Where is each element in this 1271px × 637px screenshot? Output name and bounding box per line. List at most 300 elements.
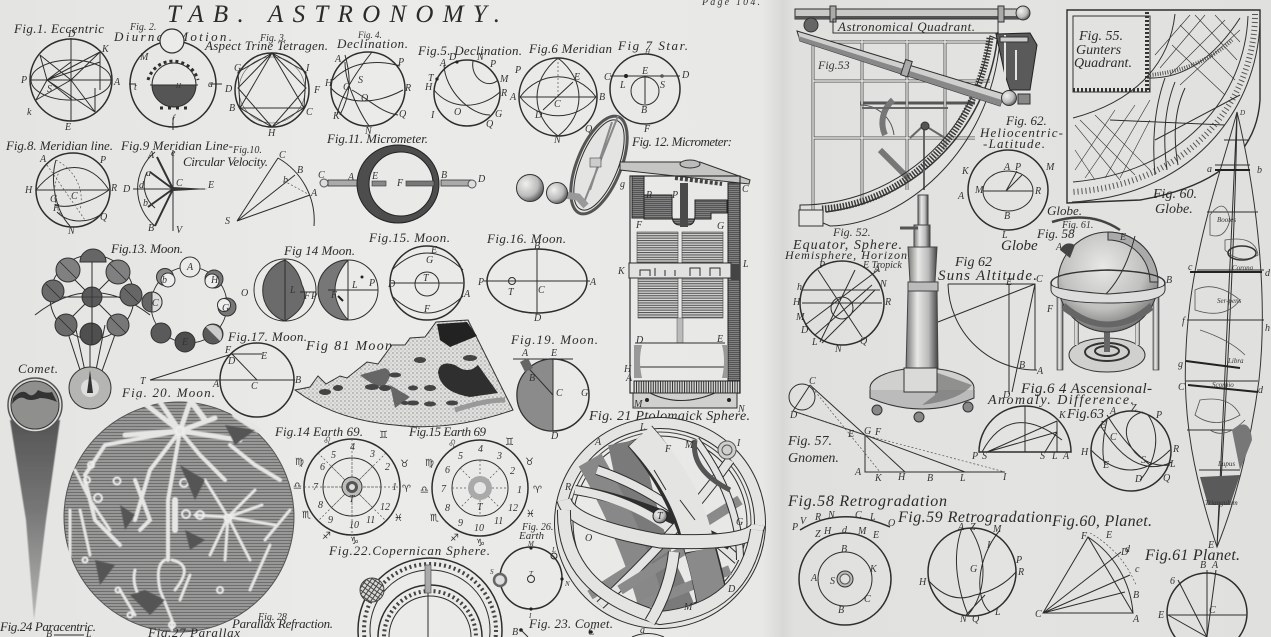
figure 14: earth zodiac: 5 bbox=[331, 450, 336, 461]
figure 16: moon orbit ellipse bbox=[477, 231, 597, 324]
figure 61: planet: E bbox=[1157, 610, 1164, 621]
figure 11: micrometer ring bbox=[318, 131, 486, 223]
figure 62: heliocentric latitude: B bbox=[1004, 211, 1010, 222]
figure 52: equator sphere: N bbox=[879, 279, 888, 290]
figure 3: aspect trine tetragon bbox=[204, 33, 328, 139]
figure 17: moon geometry: E bbox=[260, 351, 267, 362]
figure 61 and 58: globe: B bbox=[1166, 275, 1172, 286]
figure 61 and 58: globe: Globe. bbox=[1047, 203, 1082, 218]
figure 21: ptolemaic armillary sphere: G bbox=[736, 517, 743, 528]
figure 14: earth zodiac: 6 bbox=[320, 462, 325, 473]
figure 57: gnomon: D bbox=[789, 410, 798, 421]
figure 12: micrometer instrument: E bbox=[716, 334, 723, 345]
figure 58: retrogradation: C bbox=[864, 594, 871, 605]
figure 12: micrometer instrument bbox=[516, 109, 750, 415]
figure 19: moon half shaded: A bbox=[521, 348, 529, 359]
figure 52: equator sphere: Fig. 52. bbox=[832, 225, 871, 239]
figure 26: earth orbit: S bbox=[490, 568, 494, 576]
figure 52: equator sphere: N bbox=[834, 344, 843, 355]
figure 60: globe gore: d bbox=[1258, 385, 1264, 396]
figure 15: earth zodiac: ♏︎ bbox=[430, 513, 439, 524]
figure 13b: moon orbit ring: C bbox=[152, 298, 159, 309]
graduated limb bbox=[800, 36, 1000, 226]
figure 15: earth zodiac: 7 bbox=[441, 484, 447, 495]
figure 58: retrogradation: H bbox=[823, 526, 832, 537]
figure 61: planet: C bbox=[1209, 605, 1216, 616]
figure 15: moon bbox=[368, 230, 471, 320]
figure 21: ptolemaic armillary sphere: O bbox=[585, 533, 592, 544]
figure 10: circular velocity: A bbox=[310, 188, 318, 199]
figure 57: gnomon: C bbox=[809, 376, 816, 387]
figure 11: micrometer ring: C bbox=[318, 170, 325, 181]
figure 10: circular velocity: C bbox=[279, 150, 286, 161]
figure 14: earth zodiac: ♌︎ bbox=[323, 436, 332, 447]
figure 63 bbox=[1066, 403, 1179, 491]
figure 61: planet bbox=[1144, 547, 1247, 637]
figure 9: meridian line: e bbox=[171, 148, 176, 159]
figure 57: gnomon: K bbox=[874, 473, 883, 484]
figure 10: circular velocity bbox=[183, 145, 318, 227]
figure 26: earth orbit: Fig. 26. bbox=[521, 522, 553, 533]
figure 59: retrogradation: G bbox=[970, 564, 977, 575]
telescope lower tube bbox=[797, 31, 1030, 106]
figure 14: earth zodiac: T bbox=[349, 494, 356, 505]
figure 14: earth zodiac: Fig.14 Earth 69. bbox=[274, 424, 363, 439]
figure 9: meridian line: b bbox=[143, 198, 148, 209]
figure 5: declination: Q bbox=[486, 119, 494, 130]
figure 11: micrometer ring: D bbox=[477, 174, 486, 185]
figure 52: equator sphere: Q bbox=[860, 336, 868, 347]
figure 8: meridian line: C bbox=[71, 191, 78, 202]
figure 14: earth zodiac: ♎︎ bbox=[293, 481, 302, 492]
figure 60: globe gore: Lupus bbox=[1217, 460, 1235, 468]
figure 15: earth zodiac: 5 bbox=[458, 451, 463, 462]
figure 58: retrogradation: S bbox=[830, 576, 835, 587]
figure 57: gnomon: I bbox=[1002, 472, 1007, 483]
figure 62: suns altitude bbox=[938, 255, 1044, 401]
figure 3: aspect trine tetragon: G bbox=[234, 63, 241, 74]
moon rays and craters bbox=[70, 400, 290, 630]
figure 21: ptolemaic armillary sphere: T bbox=[657, 511, 664, 522]
figure 15: earth zodiac bbox=[408, 424, 542, 549]
figure 64: ascensional difference: L bbox=[1051, 451, 1058, 462]
figure 10: circular velocity: S bbox=[225, 216, 230, 227]
figure 11: micrometer ring: Fig.11. Micrometer. bbox=[326, 131, 428, 146]
figure 52: equator sphere: E Tropick bbox=[862, 260, 902, 271]
figure 60: globe gore: Ser-pens bbox=[1217, 297, 1242, 305]
figure 52: equator sphere: H bbox=[792, 297, 801, 308]
figure 14: earth zodiac: ♑︎ bbox=[350, 536, 359, 547]
figure 1: eccentric: P bbox=[20, 75, 27, 86]
figure 52: equator sphere bbox=[784, 225, 907, 355]
figure 9: meridian line: A bbox=[147, 150, 155, 161]
figure 57: gnomon: A bbox=[854, 467, 862, 478]
figure 14: earth zodiac: ♏︎ bbox=[302, 510, 311, 521]
figure 4: declination: S bbox=[358, 75, 363, 86]
figure 5: declination: R bbox=[500, 88, 507, 99]
figure 7: star: C bbox=[604, 72, 611, 83]
figure 26: earth orbit: I bbox=[528, 612, 532, 620]
figure 55: gunter's quadrant: Gunters bbox=[1076, 43, 1122, 58]
figure 25: large moon map bbox=[64, 400, 294, 632]
figure 4: declination: Declination. bbox=[336, 36, 408, 51]
telescope upper tube bbox=[795, 6, 1030, 33]
figure 64: ascensional difference: P bbox=[971, 451, 978, 462]
figure 23: comet: a bbox=[640, 625, 645, 636]
figure 11: micrometer ring: F bbox=[396, 178, 404, 189]
figure 8: meridian line: F bbox=[52, 203, 60, 214]
figure 21: ptolemaic armillary sphere: M bbox=[683, 602, 693, 613]
figure 57: gnomon: E bbox=[847, 429, 854, 440]
figure 15: earth zodiac: ♌︎ bbox=[448, 439, 457, 450]
figure 13b: moon orbit ring: b bbox=[162, 275, 167, 286]
figure 62: heliocentric latitude: L bbox=[1001, 230, 1008, 241]
figure 2: diurnal motion: H bbox=[175, 82, 182, 90]
figure 63: P bbox=[1155, 410, 1162, 421]
figure 60: globe gore: Libra bbox=[1227, 357, 1244, 365]
figure 63: H bbox=[1080, 447, 1089, 458]
figure 61: planet: Fig.61 Planet. bbox=[1144, 547, 1240, 564]
figure 5: declination: N bbox=[476, 52, 485, 63]
figure 63: R bbox=[1172, 444, 1179, 455]
figure 6: meridian: D bbox=[534, 110, 543, 121]
figure 8: meridian line: R bbox=[110, 183, 117, 194]
figure 14: moon crescents: P bbox=[310, 291, 317, 302]
figure 15: earth zodiac: ♓︎ bbox=[526, 509, 535, 520]
figure 8: meridian line: Q bbox=[100, 212, 108, 223]
figure 14: moon crescents: L bbox=[351, 280, 358, 291]
figure 4: declination: G bbox=[343, 82, 350, 93]
figure 21: ptolemaic armillary sphere: F bbox=[664, 444, 672, 455]
figure 2: diurnal motion: t bbox=[134, 82, 137, 93]
figure 15: moon: A bbox=[463, 289, 471, 300]
figure 12: micrometer instrument: A bbox=[625, 373, 633, 384]
figure 59: retrogradation: Z bbox=[970, 522, 976, 533]
figure 1: eccentric bbox=[13, 21, 121, 133]
figure 17: moon geometry: C bbox=[251, 381, 258, 392]
figure 7: star: H bbox=[644, 48, 651, 56]
figure 61 and 58: globe: Globe bbox=[1001, 238, 1038, 254]
figure 9: meridian line: Fig.9 Meridian Line- bbox=[120, 138, 233, 153]
figure 19: moon half shaded bbox=[510, 332, 598, 442]
figure 58: retrogradation: K bbox=[869, 564, 878, 575]
figure 9: meridian line: d bbox=[139, 180, 145, 191]
figure 60: globe gore: f bbox=[1182, 316, 1186, 327]
figure 60: globe gore: Fig. 60. bbox=[1152, 187, 1197, 202]
figure 14: moon crescents: P bbox=[368, 278, 375, 289]
figure 61 and 58: globe: E bbox=[1119, 232, 1126, 243]
figure 9: meridian line: a bbox=[146, 168, 151, 179]
figure 24 and 27, 28 captions bbox=[0, 612, 333, 637]
figure 15: earth zodiac: ♑︎ bbox=[476, 538, 485, 549]
figure 5: declination: T bbox=[428, 73, 435, 84]
figure 14: earth zodiac: 10 bbox=[349, 520, 359, 531]
figure 59: retrogradation: P bbox=[1015, 555, 1022, 566]
figure 60: globe gore: g bbox=[1178, 359, 1183, 370]
figure 5: declination: O bbox=[454, 107, 461, 118]
micrometer frame bbox=[620, 160, 750, 408]
figure 6: meridian: E bbox=[573, 72, 580, 83]
figure 7: star: B bbox=[641, 105, 647, 116]
figure 5: declination: P bbox=[489, 59, 496, 70]
figure 15: earth zodiac: 4 bbox=[478, 444, 483, 455]
figure 57: gnomon: G bbox=[864, 426, 871, 437]
figure 14: earth zodiac: 2 bbox=[385, 462, 390, 473]
figure 64: ascensional difference: S bbox=[982, 451, 987, 462]
figure 60: globe gore: Bootes bbox=[1217, 216, 1236, 224]
figure 81: moon map sector: Fig 81 Moon bbox=[305, 339, 392, 354]
figure 23: comet bbox=[512, 616, 664, 637]
quadrant pillar stand bbox=[870, 195, 974, 422]
figure 60: globe gore: Triangulum bbox=[1205, 499, 1238, 507]
figure 15: earth zodiac: 10 bbox=[474, 523, 484, 534]
figure 23: comet: Fig. 23. Comet. bbox=[528, 616, 613, 631]
figure 17: moon geometry: D bbox=[227, 356, 236, 367]
figure 19: moon half shaded: B bbox=[529, 373, 535, 384]
figure 7: star: Fig 7 Star. bbox=[617, 38, 688, 53]
figure 2: diurnal motion bbox=[113, 22, 232, 130]
figure 62: heliocentric latitude: A bbox=[1003, 162, 1011, 173]
figure 19: moon half shaded: C bbox=[556, 388, 563, 399]
figure 12: micrometer instrument: M bbox=[633, 399, 643, 410]
figure 14: earth zodiac: 7 bbox=[313, 482, 319, 493]
figure 6: meridian: Q bbox=[585, 124, 593, 135]
gore map features bbox=[1186, 170, 1262, 392]
figure 12: micrometer instrument: D bbox=[635, 335, 644, 346]
figure 15: moon: F bbox=[423, 304, 431, 315]
figure 5: declination: H bbox=[424, 82, 433, 93]
figure 15: moon: T bbox=[423, 273, 430, 284]
figure 62: heliocentric latitude: M bbox=[1045, 162, 1055, 173]
figure 26: earth orbit: N bbox=[564, 580, 570, 588]
figure 58: retrogradation: P bbox=[791, 522, 798, 533]
figure 26: earth orbit: M bbox=[527, 540, 535, 548]
figure 52: equator sphere: Hemisphere, Horizon bbox=[784, 248, 907, 262]
figure 64: ascensional difference: Fig.6 4 Ascensional- bbox=[1020, 381, 1152, 397]
figure 58: retrogradation: d bbox=[842, 525, 848, 536]
figure 62: heliocentric latitude: Heliocentric- bbox=[979, 125, 1063, 140]
figure 61 and 58: globe: Fig. 61. bbox=[1061, 220, 1093, 231]
figure 81: moon map sector bbox=[295, 320, 513, 427]
figure 57: gnomon: B bbox=[927, 473, 933, 484]
figure 4: declination: H bbox=[324, 78, 333, 89]
figure 22: copernican sphere: Fig.22.Copernican Sphere. bbox=[328, 543, 490, 558]
figure 19: moon half shaded: D bbox=[550, 431, 559, 442]
figure 16: moon orbit ellipse: B bbox=[534, 241, 540, 252]
figure 11: micrometer ring: E bbox=[371, 171, 378, 182]
figure 58: retrogradation: B bbox=[841, 544, 847, 555]
figure 6: meridian: B bbox=[599, 92, 605, 103]
figure 58: retrogradation: E bbox=[872, 530, 879, 541]
figure 64: ascensional difference: Anomaly. Difference. bbox=[987, 393, 1134, 408]
figure 4: declination: P bbox=[397, 57, 404, 68]
figure 21: ptolemaic armillary sphere: R bbox=[564, 482, 571, 493]
figure 63: Q bbox=[1163, 473, 1171, 484]
figure 1: eccentric: S bbox=[47, 84, 52, 95]
figure 14: earth zodiac: 3 bbox=[369, 449, 375, 460]
figure 60: globe gore: b bbox=[1257, 165, 1262, 176]
figure 9: meridian line: B bbox=[148, 223, 154, 234]
vernier box bbox=[996, 33, 1037, 90]
figure 1: eccentric: A bbox=[113, 77, 121, 88]
figure 61: planet: A bbox=[1211, 560, 1219, 571]
figure 61 and 58: globe: A bbox=[1055, 242, 1063, 253]
figure 26: earth orbit bbox=[490, 522, 570, 620]
figure 13b: moon orbit ring: G bbox=[222, 303, 229, 314]
figure 9: meridian line: V bbox=[176, 225, 184, 236]
figure 64: ascensional difference: A bbox=[1062, 451, 1070, 462]
figure 21: ptolemaic armillary sphere: D bbox=[727, 584, 736, 595]
figure 4: declination: O bbox=[361, 93, 368, 104]
figure 14: moon crescents: Fig 14 Moon. bbox=[283, 243, 355, 258]
figure 3: aspect trine tetragon: D bbox=[224, 84, 233, 95]
figure 9: meridian line: C bbox=[176, 178, 183, 189]
figure 5: declination: G bbox=[495, 109, 502, 120]
figure 10: circular velocity: B bbox=[297, 165, 303, 176]
figure 60: planet: D bbox=[1120, 547, 1129, 558]
figure 15: earth zodiac: 9 bbox=[458, 518, 463, 529]
figure 21: ptolemaic armillary sphere bbox=[560, 409, 760, 623]
figure 60: planet: c bbox=[1135, 564, 1140, 575]
figure 61 and 58: globe: Fig. 58 bbox=[1036, 226, 1075, 241]
figure 63: C bbox=[1110, 432, 1117, 443]
figure 4: declination: Fig. 4. bbox=[357, 30, 382, 40]
figure 59: retrogradation: M bbox=[992, 524, 1002, 535]
figure 5: declination bbox=[417, 43, 522, 130]
figure 59: retrogradation: Fig.59 Retrogradation bbox=[897, 509, 1052, 526]
figure 60: globe gore: E bbox=[1207, 540, 1214, 551]
figure 60: planet: B bbox=[1133, 590, 1139, 601]
figure 60: planet: A bbox=[1132, 614, 1140, 625]
figure 8: meridian line: N bbox=[67, 226, 76, 237]
figure 1: eccentric: D bbox=[67, 29, 76, 40]
figure 12: micrometer instrument: H bbox=[623, 364, 632, 375]
figure 58: retrogradation: Fig.58 Retrogradation bbox=[787, 493, 947, 510]
figure 4: declination: K bbox=[332, 111, 341, 122]
figure 58: retrogradation: R bbox=[814, 512, 821, 523]
figure 21: ptolemaic armillary sphere: I bbox=[736, 438, 741, 449]
figure 52: equator sphere: R bbox=[884, 297, 891, 308]
figure 21: ptolemaic armillary sphere: Fig. 21 Ptolomaick Sphere. bbox=[588, 409, 750, 424]
figure 63: E bbox=[1102, 460, 1109, 471]
figure 16: moon orbit ellipse: A bbox=[589, 277, 597, 288]
figure 15: moon: Fig.15. Moon. bbox=[368, 230, 450, 245]
figure 5: declination: Fig.5. Declination. bbox=[417, 43, 522, 58]
figure 17: moon geometry: Fig.17. Moon. bbox=[227, 329, 307, 344]
figure 52: equator sphere: P bbox=[818, 260, 825, 271]
figure 12: micrometer instrument: C bbox=[742, 184, 749, 195]
figure 52: equator sphere: A bbox=[873, 264, 881, 275]
figure 8: meridian line: Fig.8. Meridian line. bbox=[5, 138, 113, 153]
figure 15: earth zodiac: ♎︎ bbox=[420, 485, 429, 496]
figure 57: gnomon: Gnomen. bbox=[788, 451, 839, 466]
figure 62: heliocentric latitude: R bbox=[1034, 186, 1041, 197]
figure 16: moon orbit ellipse: Fig.16. Moon. bbox=[486, 231, 566, 246]
figure 61 and 58: globe: F bbox=[1046, 304, 1054, 315]
figure 14: earth zodiac: ♓︎ bbox=[394, 513, 403, 524]
figure 62: heliocentric latitude bbox=[957, 113, 1063, 241]
figure 60: globe gore: h bbox=[1265, 323, 1270, 334]
figure 14: earth zodiac: ♐︎ bbox=[322, 531, 331, 542]
figure 62: suns altitude: Fig 62 bbox=[954, 255, 992, 270]
figure 19: moon half shaded: Fig.19. Moon. bbox=[510, 332, 598, 347]
figure 3: aspect trine tetragon: C bbox=[306, 107, 313, 118]
figure 14: earth zodiac: ♉︎ bbox=[400, 459, 409, 470]
figure 52: equator sphere: h bbox=[797, 282, 802, 293]
figure 62: suns altitude: D bbox=[1002, 390, 1011, 401]
figure 13b: moon orbit ring: H bbox=[210, 275, 219, 286]
figure 14: earth zodiac: 9 bbox=[328, 515, 333, 526]
figure 15: earth zodiac: 6 bbox=[445, 465, 450, 476]
figure 14: moon crescents: F bbox=[303, 291, 311, 302]
figure 55: gunter's quadrant bbox=[1067, 10, 1260, 203]
figure 58: retrogradation: L bbox=[869, 512, 876, 523]
figure 3: aspect trine tetragon: H bbox=[267, 128, 276, 139]
figure 17: moon geometry: Fig. 20. Moon. bbox=[121, 385, 215, 400]
comet: Comet. bbox=[18, 361, 58, 376]
micrometer wheel bbox=[516, 109, 639, 221]
figure 63: D bbox=[1134, 474, 1143, 485]
figure 26: earth orbit: L bbox=[551, 546, 556, 554]
figure 60: planet: F bbox=[1080, 531, 1088, 542]
figure 6: meridian: C bbox=[554, 99, 561, 110]
figure 57: gnomon: Fig. 57. bbox=[787, 434, 832, 449]
figure 62: heliocentric latitude: -Latitude. bbox=[983, 136, 1045, 151]
figure 63: Fig.63 bbox=[1066, 407, 1104, 422]
figure 8: meridian line: H bbox=[24, 185, 33, 196]
figure 4: declination: Q bbox=[399, 109, 407, 120]
figure 60: globe gore: D bbox=[1239, 109, 1245, 117]
figure 15: moon: D bbox=[387, 279, 396, 290]
figure 17: moon geometry: F bbox=[224, 345, 232, 356]
figure 59: retrogradation: N bbox=[959, 614, 968, 625]
figure 10: circular velocity: Fig.10. bbox=[232, 145, 262, 156]
figure 12: micrometer instrument: Fig. 12. Micrometer: bbox=[631, 134, 732, 149]
figure 59: retrogradation bbox=[897, 509, 1052, 625]
figure 60: globe gore: d bbox=[1265, 268, 1271, 279]
figure 12: micrometer instrument: g bbox=[620, 179, 625, 190]
figure 10: circular velocity: Circular Velocity. bbox=[183, 154, 268, 169]
figure 16: moon orbit ellipse: D bbox=[533, 313, 542, 324]
figure 2: diurnal motion: M bbox=[139, 52, 149, 63]
figure 62: heliocentric latitude: Fig. 62. bbox=[1005, 113, 1047, 128]
figure 7: star: F bbox=[643, 124, 651, 135]
figure 12: micrometer instrument: K bbox=[617, 266, 626, 277]
figure 57: gnomon: F bbox=[874, 427, 882, 438]
figure 4: declination: R bbox=[404, 83, 411, 94]
figure 13b: moon orbit ring: E bbox=[181, 337, 188, 348]
figure 55: gunter's quadrant: Quadrant. bbox=[1074, 56, 1132, 71]
figure 64: ascensional difference: K bbox=[1058, 410, 1067, 421]
title: TAB. ASTRONOMY. bbox=[167, 1, 500, 28]
figure 8: meridian line: G bbox=[50, 194, 57, 205]
figure 15: earth zodiac: ♍︎ bbox=[425, 458, 434, 469]
figure 9: meridian line: E bbox=[207, 180, 214, 191]
figure 26: earth orbit: T bbox=[529, 570, 534, 578]
figure 5: declination: M bbox=[499, 74, 509, 85]
figure 13: moon phases diagram bbox=[35, 241, 183, 409]
figure 15: earth zodiac: 8 bbox=[445, 503, 450, 514]
figure 13b: moon orbit ring bbox=[142, 257, 236, 352]
figure 60: planet: Fig.60, Planet. bbox=[1051, 513, 1152, 530]
figure 17: moon geometry: A bbox=[212, 379, 220, 390]
figure 57: gnomon bbox=[787, 376, 1007, 484]
figure 63: S bbox=[1141, 455, 1146, 466]
figure 12: micrometer instrument: L bbox=[742, 259, 749, 270]
figure 55: gunter's quadrant: Fig. 55. bbox=[1078, 29, 1123, 44]
figure 60: planet: d bbox=[1125, 544, 1131, 555]
figure 61: planet: 6 bbox=[1170, 576, 1175, 587]
